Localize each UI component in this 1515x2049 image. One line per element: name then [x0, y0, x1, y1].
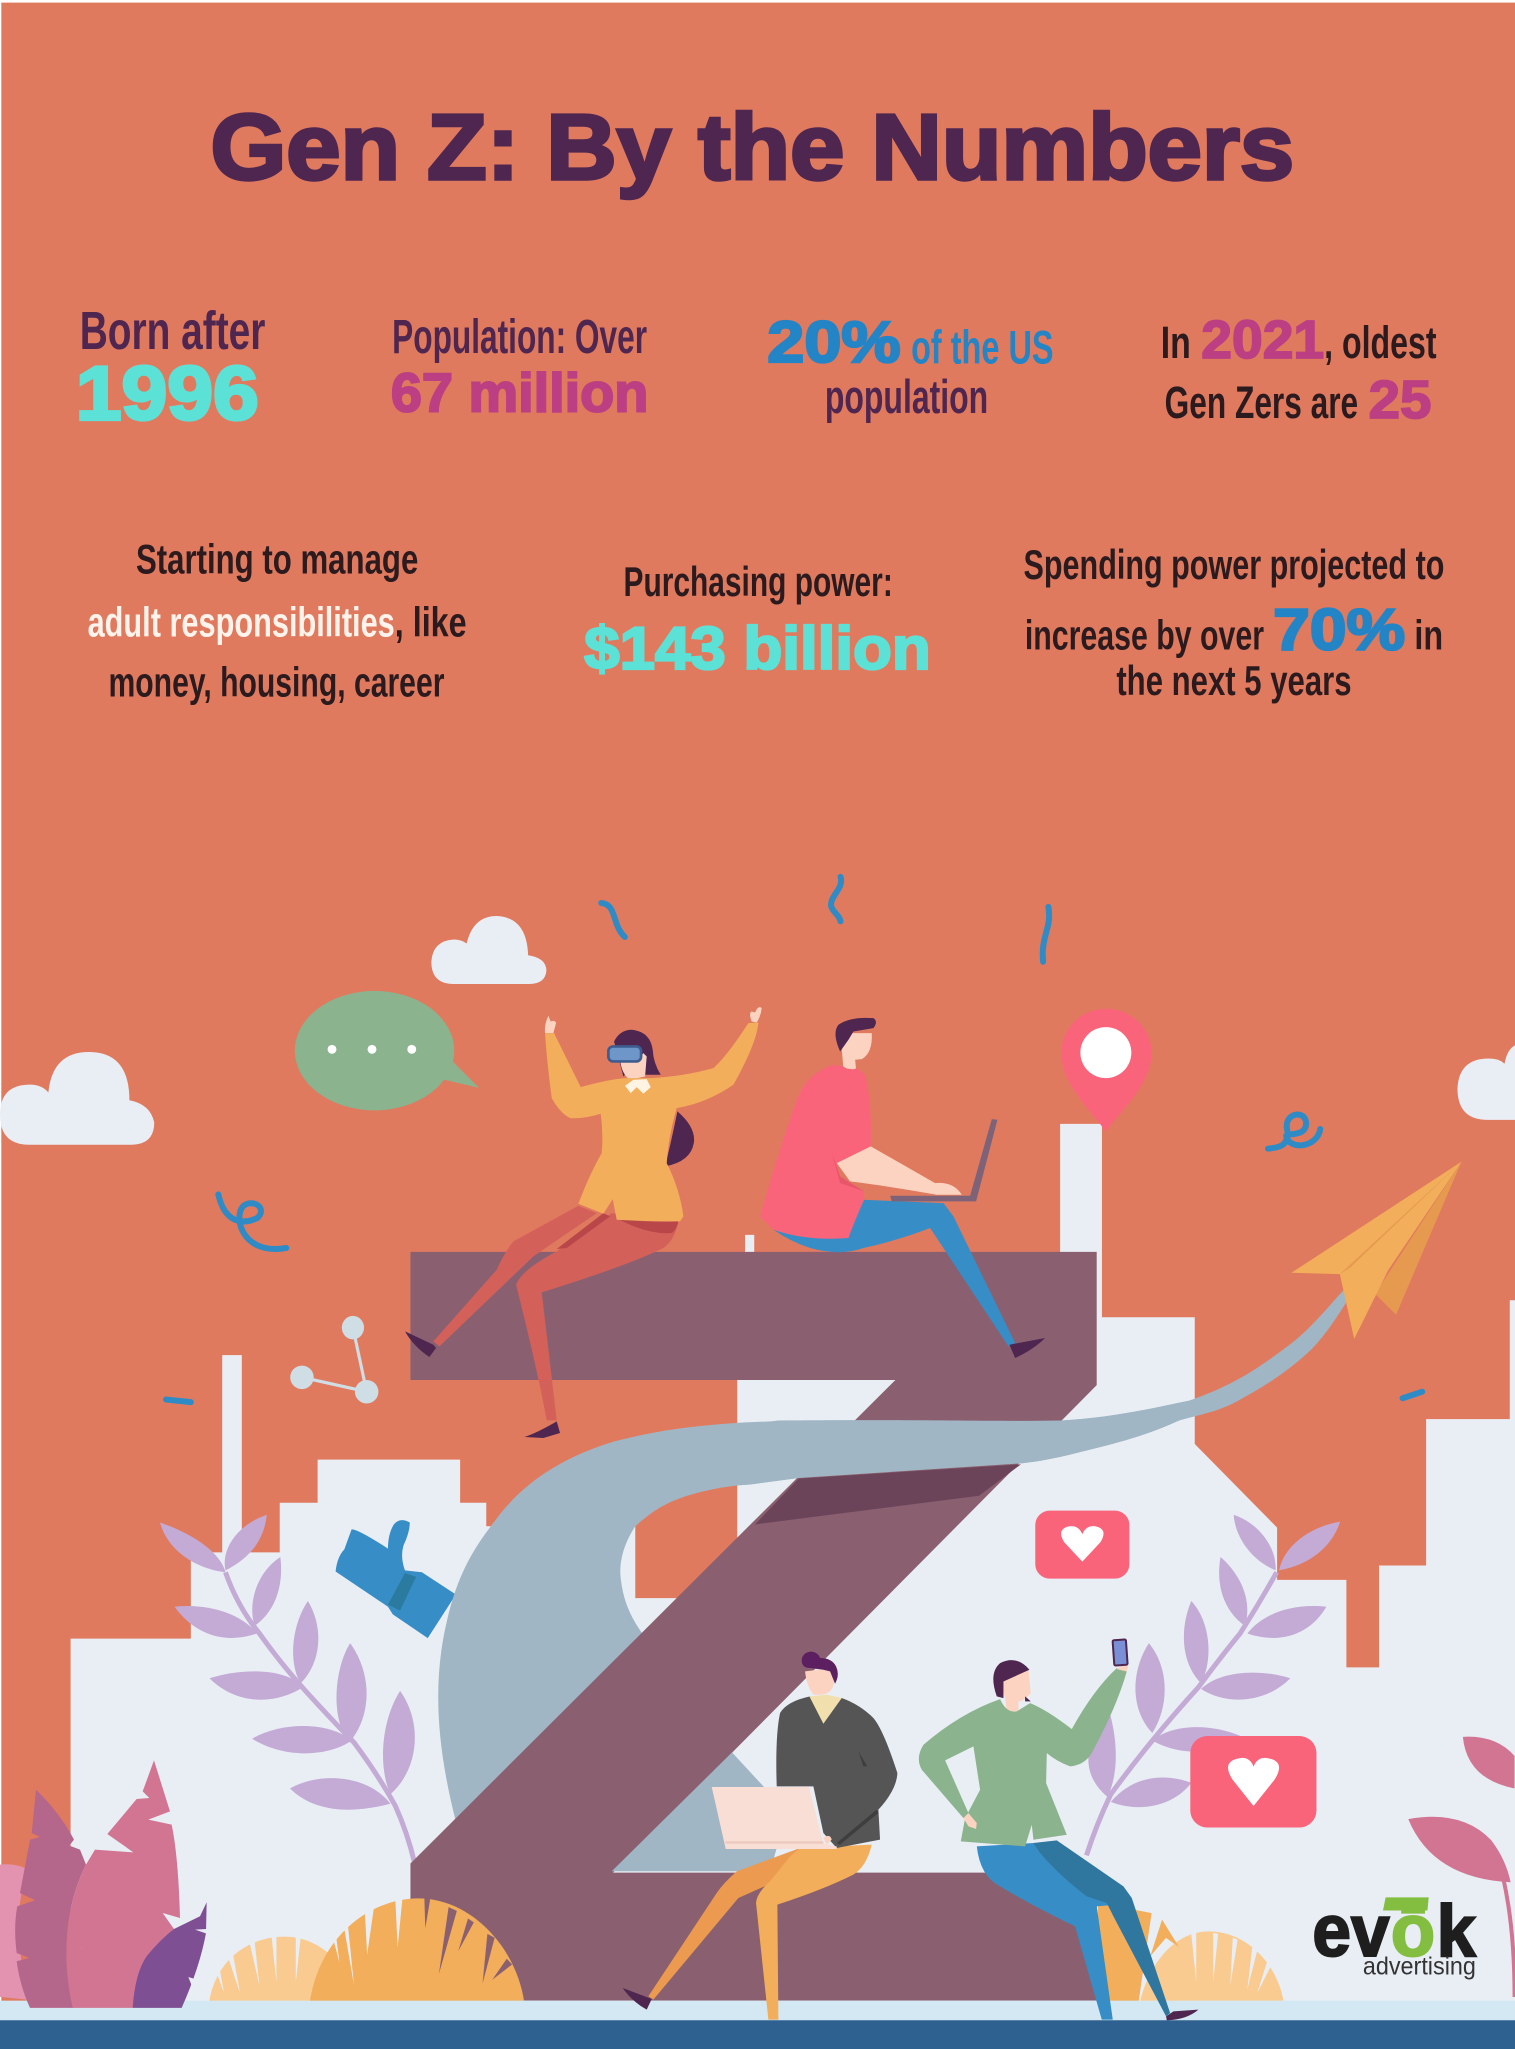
stat: spending power: the next 5 years — [1116, 657, 1352, 704]
bush: right orange — [1098, 1903, 1179, 2002]
icon: cloud right — [1457, 1045, 1515, 1120]
stat: oldest Gen Zers in 2021: 25 — [1369, 370, 1431, 430]
stat: purchasing power: Purchasing power: — [624, 558, 893, 605]
icon: squiggle confetti — [166, 877, 1422, 1402]
icon: paper plane — [1291, 1162, 1461, 1339]
stat: 20 percent of US population: of the US — [911, 320, 1054, 373]
shadow on diagonal — [755, 1464, 1021, 1524]
stat: spending power: increase by over — [1025, 611, 1264, 658]
diagonal underside triangle — [612, 1752, 784, 1871]
branch: right laurel — [1086, 1515, 1340, 1855]
icon: cloud left — [0, 1052, 154, 1145]
stat: spending power — [1024, 541, 1444, 704]
right pink plant — [1408, 1737, 1515, 1997]
bush: left pale — [209, 1937, 358, 2002]
city skyline — [71, 1124, 1515, 2002]
stat: purchasing power — [584, 558, 931, 682]
logo: evok advertising: k — [1437, 1890, 1476, 1972]
Z letter body — [410, 1252, 1097, 2001]
stat: 20 percent of US population: population — [825, 370, 988, 423]
icon: molecule network — [290, 1316, 378, 1403]
stat: adult responsibilities: money, housing, career — [108, 659, 444, 706]
icon: cloud top — [431, 916, 546, 984]
tropical leaves — [0, 1760, 207, 2008]
stat: population: Population: Over — [392, 310, 647, 364]
stat: 20 percent of US population — [767, 310, 1054, 423]
letter Z with swoosh — [410, 1252, 1348, 2001]
figure: woman with phone — [919, 1639, 1198, 2020]
figure: man with laptop — [760, 1018, 1045, 1358]
stat: adult responsibilities: Starting to manage — [136, 536, 418, 583]
title: Gen Z: By the Numbers — [210, 95, 1294, 199]
stat: oldest Gen Zers in 2021: , oldest — [1324, 317, 1437, 368]
icon: thumbs up — [336, 1520, 456, 1638]
bush: left orange — [310, 1898, 524, 2002]
branch: left laurel — [160, 1515, 415, 1863]
stat: population — [391, 310, 648, 424]
logo: evok advertising: ō — [1391, 1890, 1435, 1972]
stat: population: 67 million — [391, 362, 648, 424]
stat: adult responsibilities: adult responsibilities — [88, 598, 395, 645]
swoosh top overlay — [706, 1401, 1238, 1486]
bush: right pale — [1140, 1931, 1284, 2002]
stat: adult responsibilities: , like — [395, 598, 467, 645]
ground strip — [0, 2001, 1515, 2049]
icon: pink like box small — [1035, 1511, 1129, 1579]
icon: speech bubble — [295, 991, 479, 1110]
logo: evok advertising: ev — [1312, 1890, 1390, 1972]
icon: pink like box large — [1190, 1736, 1316, 1828]
stat: 20 percent of US population: 20% — [767, 310, 901, 375]
stat: oldest Gen Zers in 2021: In — [1161, 317, 1191, 368]
stat: spending power: in — [1414, 611, 1443, 658]
swoosh arrow — [438, 1288, 1348, 1823]
logo: evok advertising: advertising — [1363, 1954, 1476, 1981]
figure: man seated with laptop — [623, 1652, 897, 2020]
figure: woman with VR headset — [405, 1007, 762, 1438]
stat: born after 1996 — [76, 301, 265, 436]
stat: born after 1996: 1996 — [76, 351, 259, 436]
logo: evok advertising — [1312, 1890, 1476, 1981]
stat: born after 1996: Born after — [80, 301, 265, 361]
icon: map pin — [1061, 1009, 1152, 1132]
stat: spending power: 70% — [1273, 597, 1405, 662]
stat: oldest Gen Zers in 2021: Gen Zers are — [1165, 377, 1358, 428]
stat: oldest Gen Zers in 2021 — [1161, 310, 1437, 430]
stat: purchasing power: $143 billion — [584, 615, 931, 682]
stat: adult responsibilities — [88, 536, 467, 706]
stat: oldest Gen Zers in 2021: 2021 — [1201, 310, 1324, 370]
